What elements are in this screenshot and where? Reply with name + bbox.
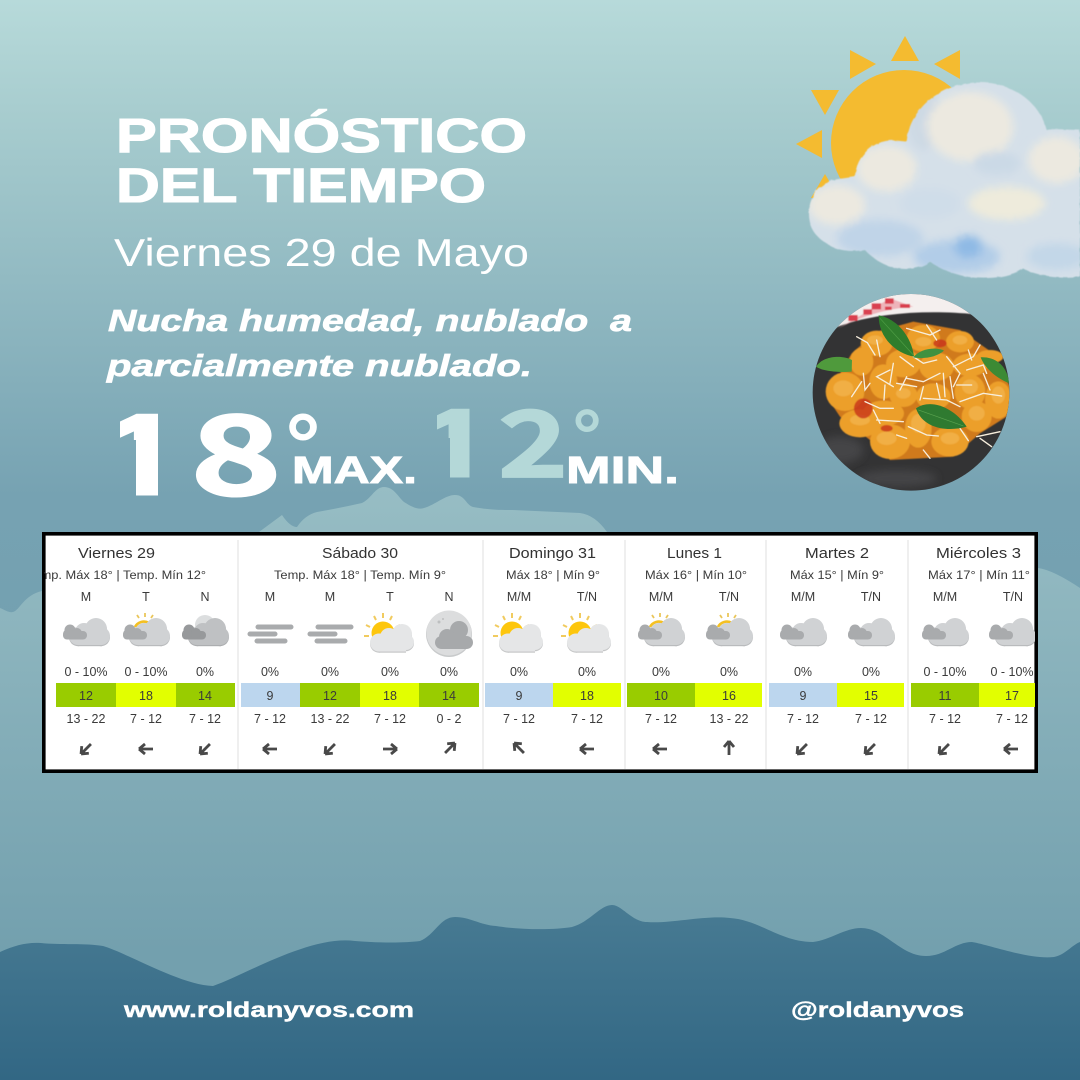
day column: Domingo 31: 0% <box>578 665 596 679</box>
day column: Sábado 30 <box>241 546 479 757</box>
day column: Lunes 1: M/M <box>649 590 673 604</box>
day column: Miércoles 3: T/N <box>1003 590 1023 604</box>
day column: Domingo 31: 9 <box>516 689 523 703</box>
day column: Lunes 1: 7 - 12 <box>645 712 677 726</box>
day column: Miércoles 3: 0 - 10% <box>923 665 967 679</box>
day column: Martes 2: Martes 2 <box>805 546 869 562</box>
day column: Lunes 1: T/N <box>719 590 739 604</box>
day column: Domingo 31 <box>485 546 621 756</box>
day column: Viernes 29: 0 - 10% <box>124 665 168 679</box>
basil leaves <box>816 315 1009 429</box>
day column: Domingo 31: Máx 18° | Mín 9° <box>506 568 600 582</box>
day column: Viernes 29: Temp. Máx 18° | Temp. Mín 12° <box>27 568 206 582</box>
day column: Lunes 1 <box>627 546 762 755</box>
day column: Domingo 31: M/M <box>507 590 531 604</box>
day column: Sábado 30: T <box>386 590 394 604</box>
day column: Martes 2: 9 <box>800 689 807 703</box>
max temperature: MAX. <box>292 450 417 492</box>
min temperature <box>437 408 676 484</box>
day column: Miércoles 3 <box>911 546 1036 757</box>
footer website: www.roldanyvos.com <box>123 999 414 1022</box>
day column: Sábado 30: 0% <box>440 665 458 679</box>
day column: Domingo 31: 18 <box>580 689 594 703</box>
min temperature: MIN. <box>566 450 679 492</box>
day column: Martes 2: 0% <box>862 665 880 679</box>
dark mountain footer band <box>0 905 1080 1080</box>
forecast summary <box>106 303 632 383</box>
day column: Lunes 1: Máx 16° | Mín 10° <box>645 568 747 582</box>
title: DEL TIEMPO <box>116 160 486 213</box>
day column: Sábado 30: Temp. Máx 18° | Temp. Mín 9° <box>274 568 446 582</box>
day column: Viernes 29: 14 <box>198 689 212 703</box>
day column: Miércoles 3: 17 <box>1005 689 1019 703</box>
day column: Martes 2: 0% <box>794 665 812 679</box>
day column: Viernes 29: 0% <box>196 665 214 679</box>
day column: Domingo 31: 7 - 12 <box>571 712 603 726</box>
day column: Sábado 30: M <box>265 590 275 604</box>
min temperature: 2 <box>498 371 568 504</box>
day column: Viernes 29: 7 - 12 <box>130 712 162 726</box>
title: PRONÓSTICO <box>116 108 527 163</box>
day column: Viernes 29: N <box>200 590 210 604</box>
day column: Sábado 30: N <box>444 590 454 604</box>
day column: Viernes 29: Viernes 29 <box>78 546 155 562</box>
day column: Miércoles 3: 7 - 12 <box>929 712 961 726</box>
day column: Sábado 30: 0% <box>381 665 399 679</box>
day column: Viernes 29: 0 - 10% <box>64 665 108 679</box>
day column: Sábado 30: 7 - 12 <box>254 712 286 726</box>
day column: Miércoles 3: 7 - 12 <box>996 712 1028 726</box>
max temperature: 8 <box>190 367 282 527</box>
day column: Miércoles 3: Máx 17° | Mín 11° <box>928 568 1030 582</box>
day column: Sábado 30: 12 <box>323 689 337 703</box>
day column: Miércoles 3: Miércoles 3 <box>936 546 1021 562</box>
day column: Lunes 1: 0% <box>720 665 738 679</box>
day column: Viernes 29: 7 - 12 <box>189 712 221 726</box>
day column: Sábado 30: 14 <box>442 689 456 703</box>
day column: Martes 2 <box>769 546 904 757</box>
day column: Sábado 30: 0% <box>261 665 279 679</box>
day column: Martes 2: M/M <box>791 590 815 604</box>
grated cheese <box>852 325 1002 458</box>
icon: sun <box>796 36 977 216</box>
day column: Viernes 29: 12 <box>79 689 93 703</box>
table frame <box>44 534 1036 771</box>
day column: Lunes 1: 10 <box>654 689 668 703</box>
day column: Lunes 1: 0% <box>652 665 670 679</box>
day column: Miércoles 3: 11 <box>939 689 952 703</box>
max temperature: 1 <box>99 390 187 520</box>
forecast summary: parcialmente nublado. <box>106 348 532 383</box>
light mountain silhouette behind table <box>0 487 1080 1080</box>
day column: Viernes 29: M <box>81 590 91 604</box>
icon: watercolor cloud <box>808 82 1080 278</box>
day column: Domingo 31: 0% <box>510 665 528 679</box>
footer social handle: @roldanyvos <box>791 999 964 1022</box>
day column: Sábado 30: 7 - 12 <box>374 712 406 726</box>
max temperature <box>120 413 414 498</box>
day column: Sábado 30: 9 <box>267 689 274 703</box>
day column: Viernes 29: 13 - 22 <box>67 712 106 726</box>
forecast summary: Nucha humedad, nublado a <box>108 303 632 338</box>
day column: Viernes 29 <box>27 546 235 757</box>
day column: Martes 2: 15 <box>864 689 878 703</box>
day column: Domingo 31: Domingo 31 <box>509 546 596 562</box>
date subtitle: Viernes 29 de Mayo <box>114 232 529 275</box>
tablecloth <box>837 294 971 328</box>
min temperature: ° <box>572 394 602 477</box>
day column: Lunes 1: 16 <box>722 689 736 703</box>
day column: Martes 2: Máx 15° | Mín 9° <box>790 568 884 582</box>
day column: Viernes 29: 18 <box>139 689 153 703</box>
day column: Sábado 30: 18 <box>383 689 397 703</box>
min temperature: 1 <box>419 389 494 498</box>
day column: Miércoles 3: 0 - 10% <box>990 665 1034 679</box>
day column: Martes 2: 7 - 12 <box>787 712 819 726</box>
day column: Sábado 30: 0% <box>321 665 339 679</box>
day column: Lunes 1: Lunes 1 <box>667 546 722 562</box>
day column: Sábado 30: 13 - 22 <box>311 712 350 726</box>
day column: Viernes 29: T <box>142 590 150 604</box>
weather forecast table <box>27 534 1036 771</box>
max temperature: ° <box>285 395 321 494</box>
day column: Sábado 30: 0 - 2 <box>436 712 462 726</box>
day column: Lunes 1: 13 - 22 <box>710 712 749 726</box>
day column: Sábado 30: Sábado 30 <box>322 546 398 562</box>
day column: Sábado 30: M <box>325 590 335 604</box>
food photo: gnocchi <box>810 292 1013 495</box>
gnocchi pile <box>826 322 1012 460</box>
day column: Domingo 31: 7 - 12 <box>503 712 535 726</box>
day column: Martes 2: T/N <box>861 590 881 604</box>
title <box>116 108 527 213</box>
day column: Miércoles 3: M/M <box>933 590 957 604</box>
day column: Domingo 31: T/N <box>577 590 597 604</box>
day column: Martes 2: 7 - 12 <box>855 712 887 726</box>
